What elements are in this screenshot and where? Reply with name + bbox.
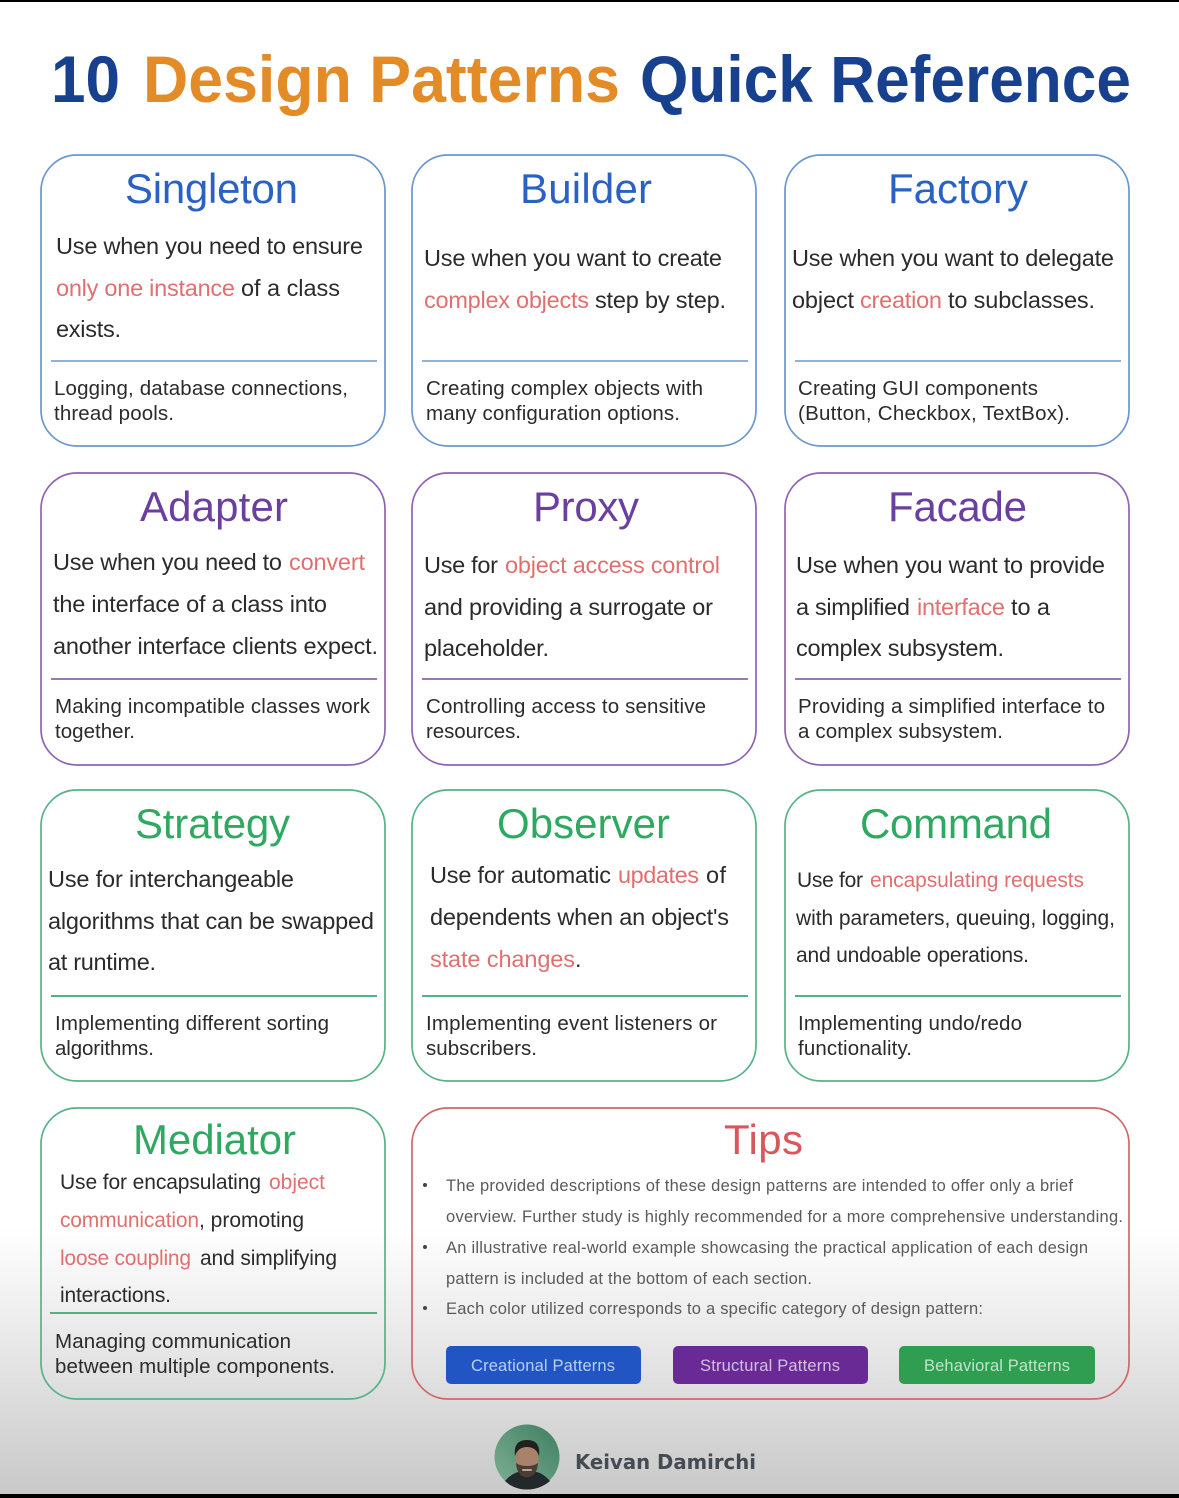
description: Facade: complex subsystem. — [796, 635, 1004, 661]
description: Observer — [430, 862, 729, 972]
description: Facade: to a — [1011, 594, 1051, 620]
description: Command: encapsulating requests — [870, 869, 1084, 892]
description: Facade: interface — [917, 594, 1005, 620]
description: Observer: updates — [618, 862, 699, 888]
example: Singleton: thread pools. — [54, 402, 174, 425]
example: Strategy — [55, 1012, 329, 1060]
description: Singleton: only one instance — [56, 275, 235, 301]
description: Factory: creation — [860, 287, 942, 313]
heading: Factory: Factory — [888, 165, 1028, 212]
icon: author avatar — [494, 1424, 560, 1490]
tips list — [423, 1177, 1123, 1318]
description: Facade: Use when you want to provide — [796, 552, 1105, 578]
description: Observer: . — [575, 946, 582, 972]
author — [494, 1424, 756, 1490]
description: Factory: to subclasses. — [948, 287, 1095, 313]
example: Adapter — [55, 695, 371, 743]
description: Mediator: interactions. — [60, 1284, 171, 1307]
example: Observer — [426, 1012, 717, 1060]
description: Mediator: loose coupling — [60, 1247, 191, 1270]
description: Observer: state changes — [430, 946, 575, 972]
description: Strategy: Use for interchangeable — [48, 866, 294, 892]
panel: Facade — [785, 473, 1129, 765]
panel: Strategy — [41, 790, 385, 1081]
heading: Command: Command — [860, 800, 1052, 847]
example: Builder: Creating complex objects with — [426, 377, 703, 400]
description: Facade — [796, 552, 1105, 661]
description: Command — [795, 869, 1115, 967]
panel: Singleton — [41, 155, 385, 446]
example: Singleton: Logging, database connections, — [54, 377, 348, 400]
description: Observer: dependents when an object's — [430, 904, 729, 930]
description: Singleton: Use when you need to ensure — [56, 233, 363, 259]
description: Observer: Use for automatic — [430, 862, 611, 888]
example: Builder — [426, 377, 703, 425]
description: Proxy: object access control — [505, 552, 720, 578]
description: Builder — [424, 245, 726, 313]
title: Quick Reference — [640, 42, 1131, 116]
heading: Observer: Observer — [497, 800, 670, 847]
legend: Behavioral Patterns — [899, 1346, 1095, 1384]
heading: Proxy: Proxy — [533, 483, 639, 530]
example: Factory — [798, 377, 1070, 425]
example: Mediator: Managing communication — [55, 1330, 291, 1353]
tips list: An illustrative real-world example showcasing the practical application of each design — [446, 1239, 1088, 1257]
example: Strategy: Implementing different sorting — [55, 1012, 329, 1035]
example: Observer: subscribers. — [426, 1037, 537, 1060]
description: Adapter: convert — [289, 549, 365, 575]
example: Proxy: resources. — [426, 720, 521, 743]
description: Adapter: another interface clients expect. — [53, 633, 378, 659]
panel: Tips — [412, 1108, 1129, 1399]
panel: Factory — [785, 155, 1129, 446]
legend: Structural Patterns: Structural Patterns — [700, 1357, 840, 1375]
example: Factory: (Button, Checkbox, TextBox). — [798, 402, 1070, 425]
description: Mediator: communication — [60, 1209, 199, 1232]
legend: Structural Patterns — [673, 1346, 868, 1384]
legend: Creational Patterns: Creational Patterns — [471, 1357, 615, 1375]
title: Design Patterns — [143, 42, 620, 116]
heading: Strategy: Strategy — [135, 800, 290, 847]
example: Mediator: between multiple components. — [55, 1355, 335, 1378]
example: Command — [798, 1012, 1022, 1060]
heading: Tips: Tips — [724, 1116, 803, 1163]
tips list: overview. Further study is highly recommended for a more comprehensive understanding. — [446, 1208, 1123, 1226]
description: Proxy: and providing a surrogate or — [424, 594, 713, 620]
description: Adapter: Use when you need to — [53, 549, 282, 575]
example: Factory: Creating GUI components — [798, 377, 1038, 400]
description: Observer: of — [706, 862, 726, 888]
heading: Builder: Builder — [520, 165, 652, 212]
description: Singleton: exists. — [56, 316, 121, 342]
heading: Facade: Facade — [888, 483, 1027, 530]
tips list: Each color utilized corresponds to a specific category of design pattern: — [446, 1300, 983, 1318]
tips list: pattern is included at the bottom of each section. — [446, 1270, 812, 1288]
description: Adapter — [53, 549, 378, 659]
description: Mediator: and simplifying — [200, 1247, 337, 1270]
title: 10 — [51, 42, 120, 116]
description: Adapter: the interface of a class into — [53, 591, 327, 617]
description: Strategy — [48, 866, 374, 975]
description: Factory: object — [792, 287, 854, 313]
description: Builder: Use when you want to create — [424, 245, 722, 271]
description: Command: with parameters, queuing, logging, — [795, 907, 1115, 930]
description: Factory: Use when you want to delegate — [792, 245, 1114, 271]
description: Strategy: algorithms that can be swapped — [48, 908, 374, 934]
legend: Creational Patterns — [446, 1346, 641, 1384]
example: Strategy: algorithms. — [55, 1037, 154, 1060]
description: Strategy: at runtime. — [48, 949, 156, 975]
example: Facade — [798, 695, 1105, 743]
example: Facade: a complex subsystem. — [798, 720, 1003, 743]
example: Singleton — [54, 377, 348, 425]
heading: Singleton: Singleton — [125, 165, 298, 212]
panel: Mediator — [41, 1108, 385, 1399]
example: Facade: Providing a simplified interface to — [798, 695, 1105, 718]
panel: Proxy — [412, 473, 756, 765]
description: Mediator: , promoting — [199, 1209, 304, 1232]
panel: Builder — [412, 155, 756, 446]
description: Proxy: Use for — [424, 552, 498, 578]
example: Observer: Implementing event listeners or — [426, 1012, 717, 1035]
description: Proxy — [424, 552, 720, 661]
description: Proxy: placeholder. — [424, 635, 549, 661]
description: Command: Use for — [797, 869, 863, 892]
example: Command: Implementing undo/redo — [798, 1012, 1022, 1035]
description: Factory — [792, 245, 1114, 313]
panel: Adapter — [41, 473, 385, 765]
tips list: The provided descriptions of these design patterns are intended to offer only a brief — [446, 1177, 1073, 1195]
description: Mediator — [60, 1171, 337, 1307]
title — [51, 42, 1131, 116]
description: Mediator: Use for encapsulating — [60, 1171, 261, 1194]
example: Mediator — [55, 1330, 335, 1378]
example: Proxy — [426, 695, 706, 743]
legend: Behavioral Patterns: Behavioral Patterns — [924, 1357, 1070, 1375]
example: Command: functionality. — [798, 1037, 912, 1060]
description: Singleton — [56, 233, 363, 342]
panel: Command — [785, 790, 1129, 1081]
example: Adapter: Making incompatible classes work — [55, 695, 371, 718]
description: Builder: complex objects — [424, 287, 589, 313]
example: Builder: many configuration options. — [426, 402, 680, 425]
author name: Keivan Damirchi — [575, 1450, 756, 1474]
description: Builder: step by step. — [595, 287, 726, 313]
heading: Mediator: Mediator — [133, 1116, 296, 1163]
description: Mediator: object — [269, 1171, 325, 1194]
description: Command: and undoable operations. — [796, 944, 1029, 967]
panel: Observer — [412, 790, 756, 1081]
description: Singleton: of a class — [241, 275, 340, 301]
description: Facade: a simplified — [796, 594, 910, 620]
heading: Adapter: Adapter — [140, 483, 288, 530]
example: Adapter: together. — [55, 720, 135, 743]
example: Proxy: Controlling access to sensitive — [426, 695, 706, 718]
